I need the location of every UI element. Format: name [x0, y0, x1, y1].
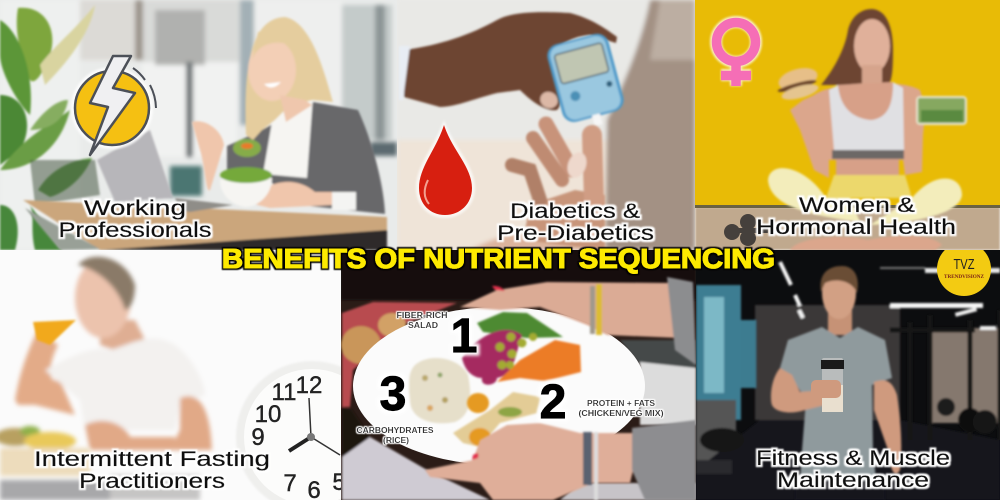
- plate: [353, 307, 645, 465]
- caption: carbohydrates: (RICE): [383, 436, 409, 445]
- clock: 11: [272, 379, 296, 406]
- salad box: [917, 97, 966, 124]
- panel: working professionals: [0, 0, 397, 250]
- caption: fibre salad: SALAD: [408, 321, 438, 330]
- caption: fibre salad: FIBER-RICH: [396, 311, 448, 320]
- caption: protein and fats: [578, 399, 664, 418]
- label: intermittent fasting: Intermittent Fasting: [34, 448, 270, 471]
- woman: [768, 9, 962, 250]
- label: intermittent fasting: [34, 448, 270, 493]
- juice glass: [33, 320, 76, 345]
- panel: nutrient order plate: [341, 245, 696, 500]
- burger: [776, 66, 820, 101]
- logo: trendvisionz: TVZ: [954, 256, 974, 273]
- food on table: [0, 426, 200, 500]
- table: [23, 198, 387, 250]
- light hand: [512, 124, 605, 250]
- caption: protein and fats: (CHICKEN/VEG MIX): [578, 409, 664, 418]
- label: diabetics: Diabetics &: [510, 200, 640, 223]
- panel: intermittent fasting: [0, 252, 341, 500]
- laptop: [97, 130, 173, 202]
- label: fitness: Fitness & Muscle: [756, 447, 950, 470]
- icon: lightning bolt energy: [71, 56, 156, 155]
- caption: fibre salad: [396, 311, 448, 330]
- clock: 9: [251, 424, 265, 451]
- panel: diabetics and pre-diabetics: [397, 0, 695, 250]
- clock: [236, 362, 341, 500]
- caption: protein and fats: PROTEIN + FATS: [587, 399, 656, 408]
- plant: [0, 5, 100, 250]
- fibre salad: [462, 312, 581, 385]
- hands: [425, 277, 696, 500]
- man: [771, 266, 901, 500]
- label: intermittent fasting: Practitioners: [79, 470, 225, 493]
- label: diabetics: [497, 200, 654, 245]
- dumbbell: [724, 214, 768, 246]
- clock: 5: [332, 469, 346, 496]
- label: working professionals: Professionals: [58, 219, 212, 242]
- panel: fitness and muscle maintenance: [696, 242, 1000, 500]
- title: BENEFITS OF NUTRIENT SEQUENCING: [222, 243, 775, 274]
- dark hand: [399, 12, 617, 111]
- number labels: 3: [380, 368, 406, 421]
- clock: 7: [283, 470, 297, 497]
- shaker bottle: [811, 358, 844, 412]
- number labels: [380, 318, 565, 424]
- icon: female symbol: [716, 22, 756, 86]
- label: diabetics: Pre-Diabetics: [497, 222, 654, 245]
- logo: trendvisionz: TRENDVISIONZ: [944, 274, 984, 280]
- man: [15, 257, 212, 450]
- number labels: 1: [451, 310, 477, 363]
- label: fitness: [756, 447, 950, 492]
- clock: 12: [296, 372, 322, 399]
- label: women: Hormonal Health: [756, 216, 956, 239]
- panel: women and hormonal health: [695, 0, 1000, 250]
- label: working professionals: [58, 197, 212, 242]
- caption: carbohydrates: [356, 426, 434, 445]
- label: working professionals: Working: [84, 197, 186, 220]
- label: women: Women &: [799, 194, 915, 217]
- caption: carbohydrates: CARBOHYDRATES: [356, 426, 434, 435]
- icon: blood drop: [416, 120, 475, 218]
- logo: trendvisionz: [937, 242, 991, 296]
- glucose meter: [546, 32, 625, 125]
- label: women: [756, 194, 956, 239]
- chicken mix: [453, 392, 540, 447]
- woman: [192, 17, 385, 214]
- rice: [409, 358, 470, 423]
- number labels: 2: [540, 376, 566, 429]
- label: fitness: Maintenance: [777, 469, 929, 492]
- clock: 10: [255, 401, 281, 428]
